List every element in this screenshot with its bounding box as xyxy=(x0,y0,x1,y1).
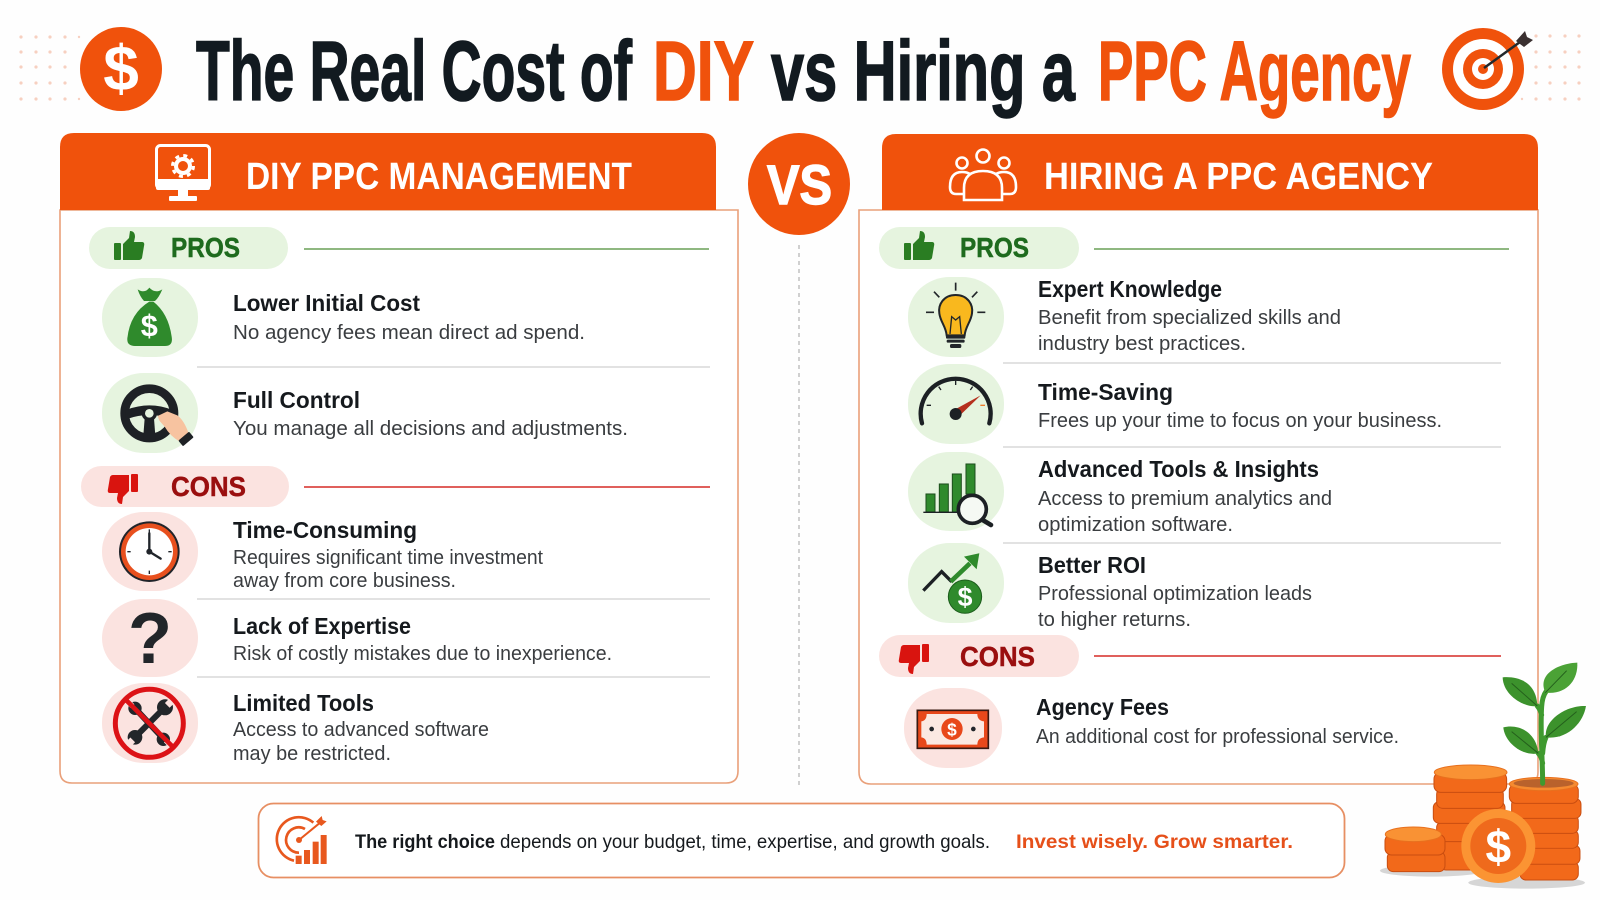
icon: growth arrow with coin xyxy=(923,553,982,613)
divider: dashed centre line xyxy=(798,245,800,785)
item: better ROI: to higher returns. xyxy=(1038,609,1191,631)
title: vs Hiring a xyxy=(771,24,1076,118)
item: better ROI xyxy=(908,543,1312,631)
item: advanced tools and insights xyxy=(908,452,1332,536)
item: lack of expertise: Lack of Expertise xyxy=(233,613,411,639)
item: time-saving: Time-Saving xyxy=(1038,379,1173,405)
item: limited tools: Limited Tools xyxy=(233,690,374,716)
illustration: coin stacks with plant xyxy=(1380,663,1586,889)
item: time-consuming: Time-Consuming xyxy=(233,517,417,543)
icon: crossed out tools xyxy=(115,689,183,757)
item: lower initial cost: Lower Initial Cost xyxy=(233,290,420,316)
callout: bottom takeaway xyxy=(258,804,1344,878)
item: full control: Full Control xyxy=(233,387,360,413)
cons label: CONS xyxy=(960,641,1035,672)
icon: monitor with gear xyxy=(156,146,210,201)
takeaway text: Invest wisely. Grow smarter. xyxy=(1016,831,1293,853)
icon: banknote xyxy=(917,710,988,748)
item: agency fees xyxy=(904,688,1399,768)
icon: dollar coin xyxy=(80,27,162,111)
pros header: DIY xyxy=(89,227,709,269)
vs badge: VS xyxy=(767,153,832,216)
item: better ROI: Better ROI xyxy=(1038,552,1146,578)
pros label: PROS xyxy=(171,232,240,263)
takeaway text: depends on your budget, time, expertise, and growth goals. xyxy=(500,831,990,853)
icon: thumbs down xyxy=(899,644,929,674)
icon: banknote: $ xyxy=(947,719,957,739)
item: agency fees: Agency Fees xyxy=(1036,694,1169,720)
icon: thumbs up xyxy=(114,231,144,260)
illustration: coin stacks with plant: $ xyxy=(1486,821,1511,873)
item: limited tools xyxy=(102,683,489,765)
icon: dollar coin: $ xyxy=(103,32,139,104)
icon: question mark: ? xyxy=(128,599,172,679)
title: DIY xyxy=(653,24,754,118)
title: PPC Agency xyxy=(1098,24,1411,118)
item: lack of expertise: Risk of costly mistakes due to inexperience. xyxy=(233,643,612,665)
item: lower initial cost xyxy=(102,278,585,357)
item: time-consuming xyxy=(102,512,543,592)
takeaway text xyxy=(355,831,1293,853)
title xyxy=(196,24,1411,118)
icon: target with bars xyxy=(277,816,327,864)
panel: hiring a PPC agency xyxy=(859,134,1538,784)
item: limited tools: may be restricted. xyxy=(233,743,391,765)
icon: team of people xyxy=(950,150,1016,200)
panel heading: DIY: DIY PPC MANAGEMENT xyxy=(246,156,632,198)
panel: DIY PPC management xyxy=(60,133,738,783)
icon: clock xyxy=(119,521,180,582)
icon: target with arrow xyxy=(1442,28,1533,110)
item: better ROI: Professional optimization leads xyxy=(1038,583,1312,605)
item: limited tools: Access to advanced software xyxy=(233,719,489,741)
pros label: PROS xyxy=(960,232,1029,263)
item: expert knowledge: industry best practices. xyxy=(1038,333,1246,355)
cons header: DIY xyxy=(81,466,710,507)
item: expert knowledge xyxy=(908,276,1341,357)
item: expert knowledge: Benefit from specialized skills and xyxy=(1038,307,1341,329)
icon: bar chart with magnifier xyxy=(923,464,991,525)
item: full control: You manage all decisions and adjustments. xyxy=(233,418,628,440)
panel header: DIY xyxy=(60,133,716,210)
item: time-consuming: Requires significant time investment xyxy=(233,547,543,569)
panel heading: agency: HIRING A PPC AGENCY xyxy=(1044,156,1433,198)
title: The Real Cost of xyxy=(196,24,633,118)
cons label: CONS xyxy=(171,471,246,502)
icon: light bulb xyxy=(926,283,985,348)
item: time-saving: Frees up your time to focus on your business. xyxy=(1038,410,1442,432)
takeaway text: The right choice xyxy=(355,831,495,853)
item: advanced tools and insights: Access to premium analytics and xyxy=(1038,488,1332,510)
item: lack of expertise xyxy=(102,599,612,679)
icon: money bag: $ xyxy=(141,309,158,343)
item: time-saving xyxy=(908,364,1442,444)
item: time-consuming: away from core business. xyxy=(233,570,456,592)
item: agency fees: An additional cost for professional service. xyxy=(1036,726,1399,748)
icon: speedometer xyxy=(921,379,991,423)
item: lower initial cost: No agency fees mean direct ad spend. xyxy=(233,322,585,344)
icon: money bag xyxy=(127,288,172,346)
item: advanced tools and insights: Advanced Tools & Insights xyxy=(1038,456,1319,482)
icon: thumbs up xyxy=(904,231,934,260)
item: full control xyxy=(102,373,628,453)
pros header: agency xyxy=(879,227,1509,269)
cons header: agency xyxy=(879,635,1501,677)
icon: steering wheel with hand xyxy=(125,389,194,446)
icon: growth arrow with coin: $ xyxy=(958,582,973,612)
item: expert knowledge: Expert Knowledge xyxy=(1038,276,1222,302)
icon: thumbs down xyxy=(108,474,138,504)
item: advanced tools and insights: optimization software. xyxy=(1038,514,1233,536)
panel header: agency xyxy=(882,134,1538,210)
vs badge xyxy=(748,133,850,235)
